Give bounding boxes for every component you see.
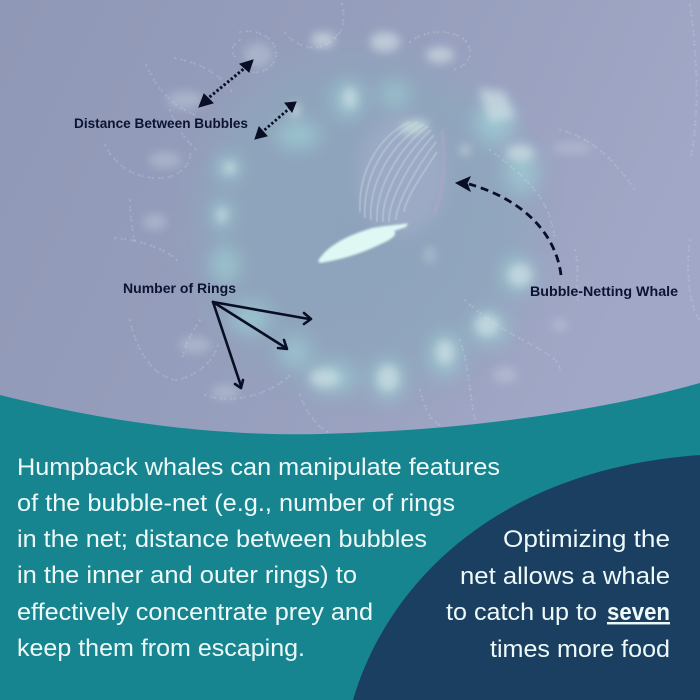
text block: how whales manipulate the net: effectively concentrate prey and [17,599,373,626]
arrow: distance between inner bubbles [255,102,296,139]
text block: optimizing the net callout: net allows a whale [460,563,670,590]
whale pectoral fin [318,223,408,263]
text block: how whales manipulate the net: Humpback whales can manipulate features [17,454,500,481]
arrow: distance between outer bubbles [199,60,253,107]
text block: how whales manipulate the net: of the bubble-net (e.g., number of rings [17,490,455,517]
text block: how whales manipulate the net [17,454,500,662]
arrows: number of rings [213,302,311,388]
text block: optimizing the net callout: to catch up to [446,599,597,626]
whale chin highlight [399,119,429,135]
text block: optimizing the net callout: seven [607,599,670,626]
photo: humpback whale [318,115,446,263]
text block: optimizing the net callout [446,526,670,663]
label: Number of Rings: Number of Rings [123,280,236,296]
whale throat pleats [360,122,437,222]
text block: optimizing the net callout: times more food [490,636,670,663]
panel: teal text band [0,383,700,700]
photo: sparkling outer ring of bubbles [105,4,700,432]
panel: navy callout shape [353,455,700,700]
whale right edge [434,130,444,215]
text block: how whales manipulate the net: keep them from escaping. [17,635,305,662]
photo: ocean surface background [0,0,700,450]
photo: teal water glow inside bubble net [160,20,570,430]
photo: bubble patches of the net [143,32,592,400]
text block: how whales manipulate the net: in the net; distance between bubbles [17,526,427,553]
text block: how whales manipulate the net: in the inner and outer rings) to [17,562,357,589]
label: Bubble-Netting Whale: Bubble-Netting Whale [530,283,678,299]
text block: optimizing the net callout: Optimizing the [503,526,670,553]
label: Distance Between Bubbles: Distance Between Bubbles [74,115,248,131]
arrow: to bubble-netting whale [456,177,561,275]
